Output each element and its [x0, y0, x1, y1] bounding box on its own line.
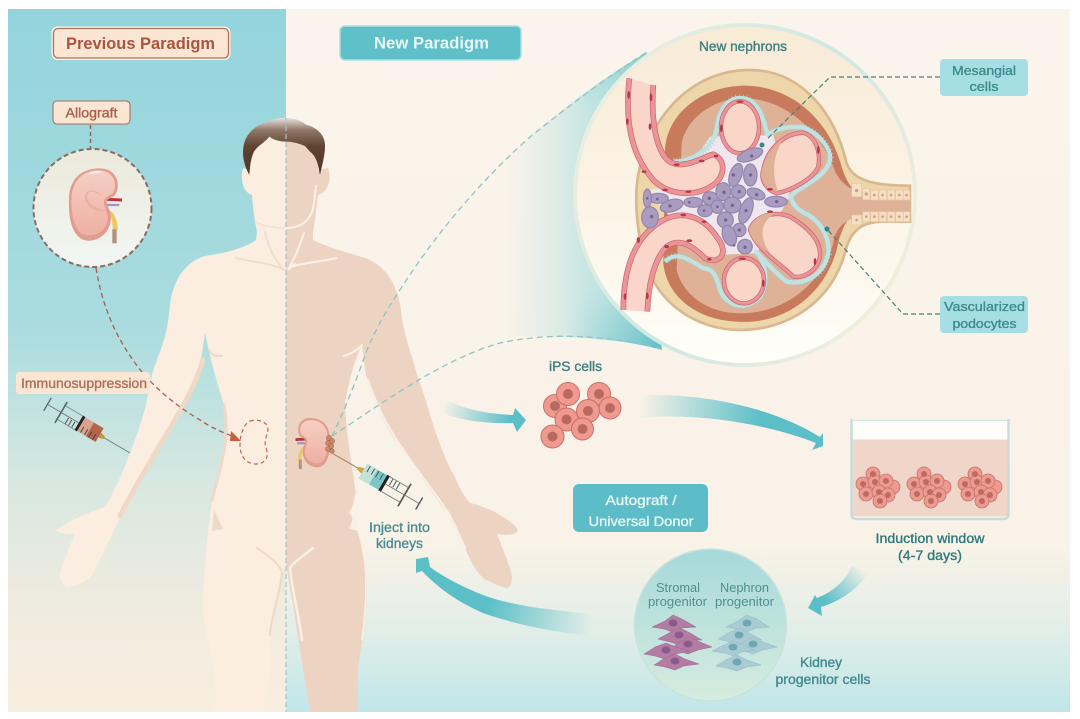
callout: autograft / universal donor: Autograft / — [606, 492, 677, 508]
podocyte layer — [665, 98, 830, 306]
text: induction window: Induction window — [876, 531, 985, 546]
background: new paradigm side — [286, 9, 1070, 712]
background: previous paradigm side — [8, 9, 286, 712]
callout: mesangial cells: Mesangial — [952, 63, 1016, 78]
callout: vascularized podocytes — [940, 296, 1028, 333]
organoid clusters — [856, 467, 1002, 508]
text: inject into kidneys: Inject into — [369, 520, 430, 535]
text: induction window: (4-7 days) — [898, 548, 962, 563]
body shading lines — [120, 186, 465, 640]
nephron magnifier — [575, 25, 915, 365]
capsule brown layer — [663, 86, 860, 322]
endothelial nuclei — [624, 91, 820, 300]
title: new paradigm: New Paradigm — [374, 34, 489, 52]
callout: mesangial cells: cells — [970, 79, 999, 94]
title: new paradigm — [340, 26, 521, 60]
callout: autograft / universal donor — [573, 484, 708, 532]
mesangial cells — [642, 145, 787, 254]
text: nephron progenitor: Nephron — [720, 581, 769, 595]
label: immunosuppression — [16, 372, 150, 394]
allograft delivery dashed path — [96, 268, 232, 436]
text: kidney progenitor cells: progenitor cells — [776, 672, 871, 687]
arrow: dish to progenitors — [808, 566, 868, 616]
capillary loop: bottom — [724, 258, 764, 303]
stromal progenitor cells — [644, 615, 712, 670]
label: immunosuppression: Immunosuppression — [21, 375, 147, 391]
label: allograft — [53, 101, 130, 124]
icon: syringe left — [41, 394, 136, 463]
arrow tip: allograft — [230, 431, 241, 441]
callout line: mesangial cells — [760, 77, 940, 148]
capsule outer layer — [636, 70, 910, 330]
icon: donor kidney — [69, 168, 122, 243]
icon: syringe right — [324, 441, 426, 515]
allograft connector — [90, 125, 92, 149]
callout: vascularized podocytes: podocytes — [952, 316, 1017, 331]
arrow: body to iPS cells — [440, 400, 526, 432]
capillary loop: right lower — [749, 213, 820, 277]
body: right half — [286, 125, 518, 712]
tubule cells — [852, 183, 910, 225]
arteriole lower — [623, 215, 723, 312]
capillary loop: right upper — [761, 133, 819, 193]
transplanted kidney with injected cells — [295, 418, 335, 469]
nephron progenitor cells — [712, 615, 777, 671]
arrow: iPS cells to dish — [640, 395, 823, 450]
progenitor cells circle — [634, 549, 786, 701]
label: allograft: Allograft — [66, 106, 118, 120]
text: iPS cells: iPS cells — [549, 359, 602, 374]
text: stromal progenitor: Stromal — [656, 581, 700, 595]
callout: mesangial cells — [940, 59, 1028, 96]
iPS cell cluster — [541, 382, 621, 448]
text: nephron progenitor: progenitor — [715, 595, 774, 609]
heading: new nephrons: New nephrons — [699, 39, 787, 54]
body: left half — [56, 125, 286, 712]
nephron illustration — [623, 70, 910, 330]
dashed kidney outline — [240, 420, 268, 464]
arrow: progenitors to injection — [416, 557, 592, 636]
callout: autograft / universal donor: Universal Donor — [588, 513, 694, 529]
title: previous paradigm: Previous Paradigm — [66, 35, 215, 53]
human body — [56, 118, 518, 712]
mesangial matrix — [647, 135, 790, 255]
capillary loop: top — [721, 101, 759, 153]
midline divider — [285, 118, 287, 712]
text: inject into kidneys: kidneys — [376, 536, 423, 551]
callout: vascularized podocytes: Vascularized — [944, 299, 1025, 314]
callout line: vascularized podocytes — [824, 226, 940, 314]
hair — [243, 118, 325, 175]
dashed connectors from kidney to magnifier — [332, 52, 662, 436]
title: previous paradigm — [52, 26, 230, 60]
text: stromal progenitor: progenitor — [648, 595, 707, 609]
text: kidney progenitor cells: Kidney — [800, 655, 842, 670]
allograft circle with kidney — [34, 149, 152, 267]
culture dish — [852, 419, 1008, 519]
arteriole upper — [628, 78, 723, 193]
urinary space — [677, 98, 910, 313]
connector wedge to nephron magnifier — [495, 52, 662, 350]
